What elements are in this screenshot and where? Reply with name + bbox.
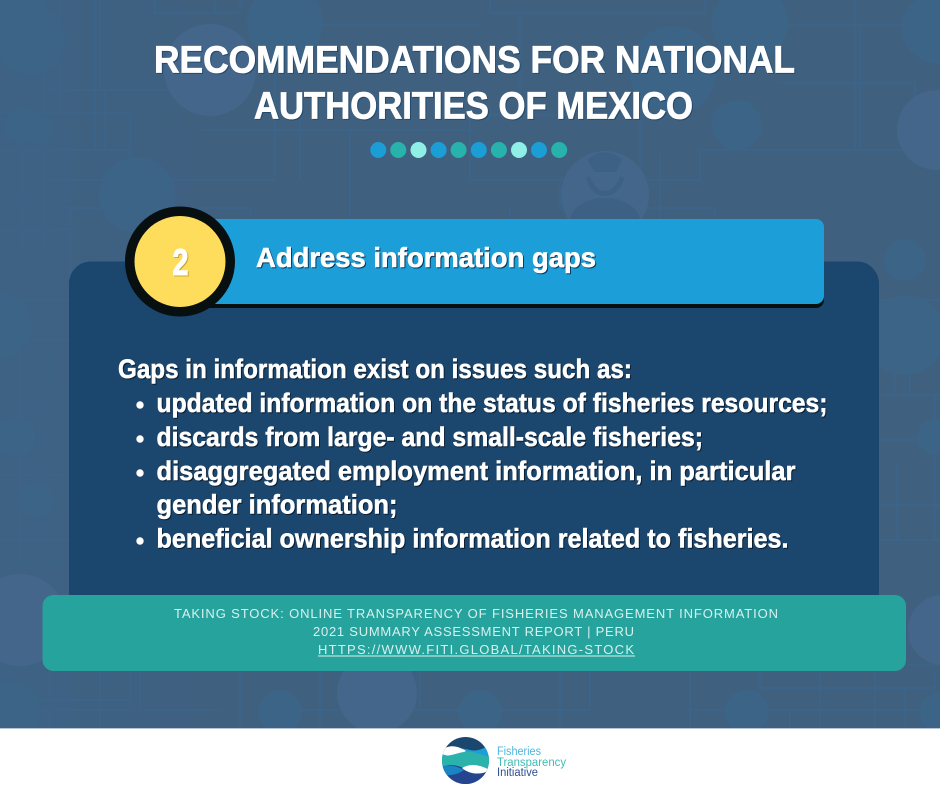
- logo mark: [442, 737, 489, 784]
- source banner: 2021 SUMMARY ASSESSMENT REPORT | PERU: [313, 624, 634, 639]
- number badge: [125, 206, 235, 316]
- title: [154, 40, 795, 128]
- source banner: HTTPS://WWW.FITI.GLOBAL/TAKING-STOCK: [318, 642, 634, 657]
- body text: [118, 354, 828, 554]
- logo wordmark: Fisheries: [497, 746, 541, 758]
- logo: [442, 737, 566, 784]
- dotted divider: [370, 142, 567, 158]
- bullet list: discards from large- and small-scale fisheries;: [156, 422, 703, 452]
- icon: officer silhouette: [570, 152, 640, 219]
- footer strip: [0, 728, 940, 788]
- source banner: TAKING STOCK: ONLINE TRANSPARENCY OF FISHERIES MANAGEMENT INFORMATION: [174, 606, 778, 621]
- title: RECOMMENDATIONS FOR NATIONAL: [154, 40, 795, 82]
- heading: Address information gaps: [256, 242, 596, 273]
- logo wordmark: [497, 746, 566, 779]
- source banner: [42, 595, 906, 671]
- title: AUTHORITIES OF MEXICO: [254, 86, 693, 128]
- panel: recommendation body: [69, 262, 879, 622]
- bullet list: disaggregated employment information, in particular: [156, 456, 796, 486]
- bullet list: gender information;: [156, 490, 398, 520]
- body text: Gaps in information exist on issues such as:: [118, 354, 632, 384]
- heading bar: [190, 219, 824, 308]
- bullet list: updated information on the status of fisheries resources;: [156, 388, 828, 418]
- logo wordmark: Initiative: [497, 767, 538, 779]
- number badge: 2: [172, 242, 188, 283]
- logo wordmark: Transparency: [497, 757, 566, 769]
- bullet list: beneficial ownership information related to fisheries.: [156, 524, 788, 554]
- bullet list: [136, 388, 828, 554]
